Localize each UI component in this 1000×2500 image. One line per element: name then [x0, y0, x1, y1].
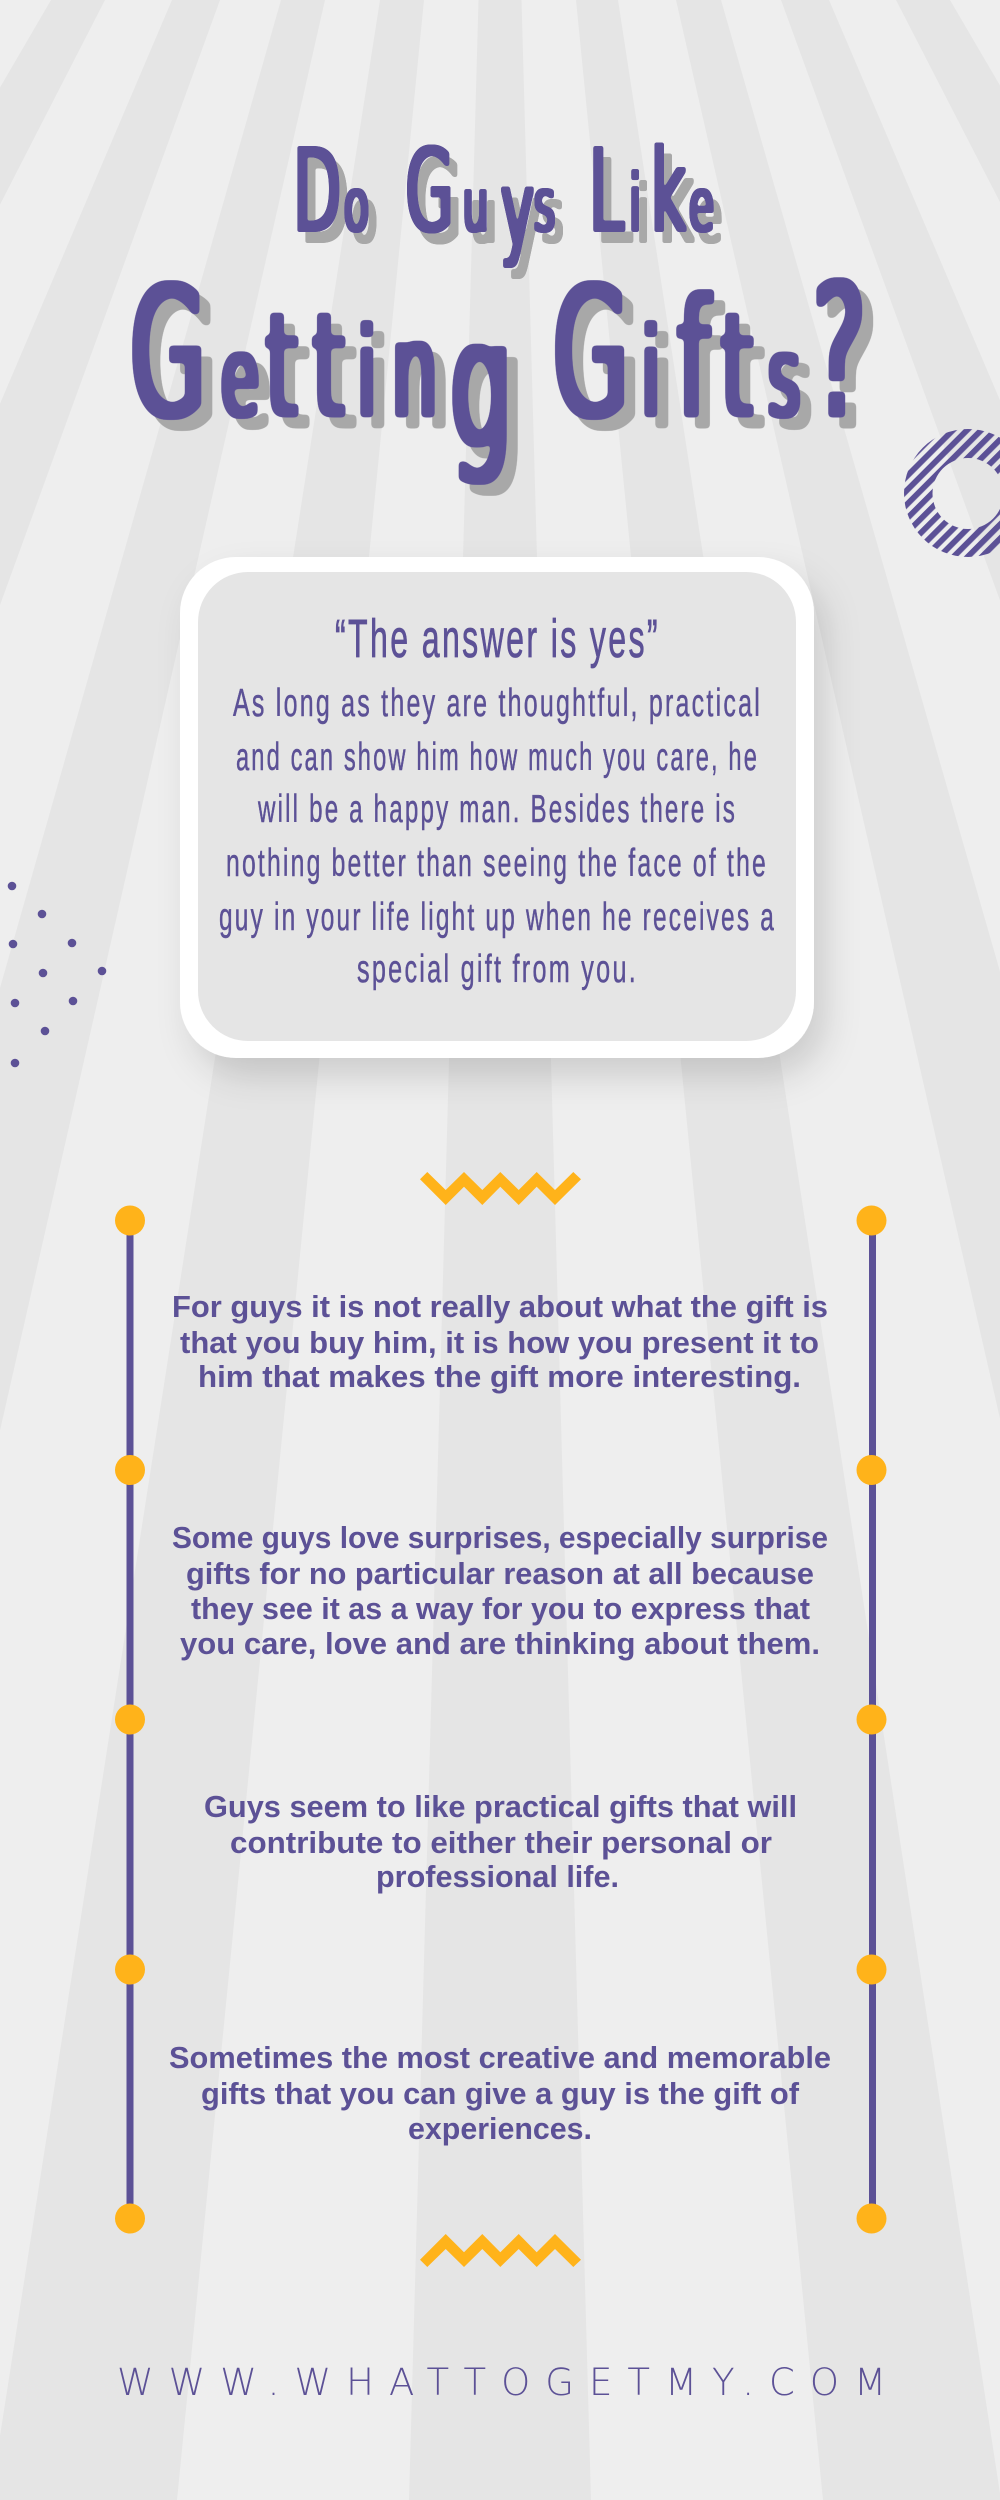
paragraph 4	[169, 2040, 831, 2146]
title line 2: G	[130, 249, 206, 460]
paragraph 2: you care, love and are thinking about them.	[180, 1626, 820, 1661]
title line 1	[293, 124, 714, 270]
title line 1: s	[534, 163, 555, 250]
paragraph 1	[172, 1289, 828, 1394]
paragraph 4: gifts that you can give a guy is the gift of	[201, 2076, 800, 2111]
paragraph 3	[204, 1789, 797, 1894]
paragraph 2	[172, 1520, 828, 1661]
title line 2	[130, 246, 866, 490]
paragraph 2: they see it as a way for you to express that	[191, 1591, 810, 1626]
paragraph 4: experiences.	[408, 2111, 592, 2146]
title line 2: ?	[813, 246, 866, 461]
card white frame	[180, 557, 814, 1058]
paragraph 3: contribute to either their personal or	[230, 1825, 772, 1860]
title line 1: k	[651, 124, 687, 258]
title line 2: tt	[266, 283, 344, 451]
right timeline	[856, 1206, 886, 2234]
title line 2: i	[642, 303, 660, 446]
icon: striped ring	[904, 429, 1000, 557]
paragraph 4: Sometimes the most creative and memorable	[169, 2040, 831, 2075]
footer url: WWW.WHATTOGETMY.COM	[117, 2361, 886, 2404]
title line 1: y	[501, 148, 534, 270]
left timeline	[115, 1206, 145, 2234]
paragraph 3: Guys seem to like practical gifts that will	[204, 1789, 797, 1824]
title line 1: o	[344, 163, 369, 250]
paragraph 1: that you buy him, it is how you present it to	[180, 1325, 819, 1360]
title line 2: t	[721, 283, 752, 451]
title line 1: e	[689, 163, 714, 250]
title line 1: u	[463, 163, 488, 250]
title line 2: f	[678, 264, 711, 456]
card body text	[219, 682, 776, 991]
title line 1: L	[589, 124, 624, 258]
card heading: “The answer is yes”	[335, 609, 660, 669]
paragraph 1: him that makes the gift more interesting.	[198, 1359, 801, 1394]
icon: dot cluster	[8, 882, 106, 1067]
paragraph 2: Some guys love surprises, especially surprise	[172, 1520, 828, 1555]
title line 2: i	[357, 303, 376, 446]
title line 2: s	[768, 313, 800, 443]
paragraph 2: gifts for no particular reason at all because	[186, 1556, 814, 1591]
icon: bottom zigzag	[420, 2234, 581, 2267]
panel: quote card	[180, 557, 814, 1058]
title line 2: G	[553, 249, 629, 460]
icon: top zigzag	[420, 1172, 581, 1205]
title line 1: i	[629, 158, 641, 251]
paragraph 1: For guys it is not really about what the gift is	[172, 1289, 828, 1324]
card body text: special gift from you.	[357, 948, 638, 991]
title line 1: D	[293, 124, 341, 258]
title line 2: e	[221, 313, 259, 443]
paragraph 3: professional life.	[376, 1859, 619, 1894]
title line 1: G	[406, 124, 454, 258]
title line 2: n	[392, 295, 437, 448]
card inner fill	[198, 572, 796, 1041]
title line 2: g	[450, 280, 512, 490]
